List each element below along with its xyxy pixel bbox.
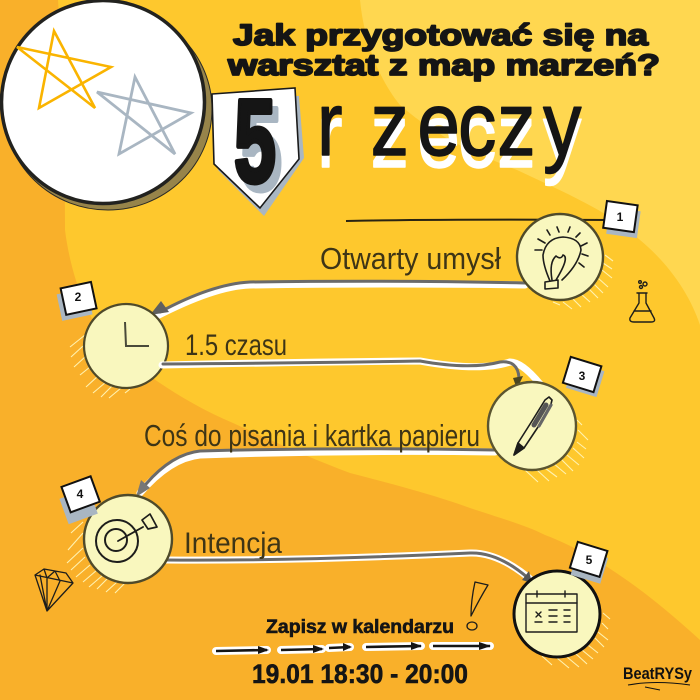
title — [227, 19, 660, 82]
step 1: Otwarty umysł — [150, 201, 641, 317]
heading: rzeczy: rzeczy — [317, 73, 582, 174]
hatch — [553, 255, 613, 309]
hatch — [70, 335, 130, 398]
badge: 5: 5 — [240, 84, 282, 216]
calendar note — [216, 617, 491, 689]
icon: grey star — [97, 77, 191, 154]
heading: rzeczy: rzeczy — [317, 85, 582, 186]
label: Coś do pisania i kartka papieru — [144, 418, 480, 453]
icon: pen — [514, 397, 552, 455]
number badge 1 — [603, 201, 641, 238]
title: Jak przygotować się na — [233, 19, 648, 52]
step 4: Intencja — [59, 476, 535, 593]
arrow 2 to 3 — [162, 361, 540, 389]
number badge 3 — [563, 357, 604, 397]
number badge 4 — [59, 476, 100, 524]
arrows — [216, 642, 491, 654]
icon: calendar — [526, 591, 577, 632]
logo: BeatRYSy — [623, 664, 692, 690]
icon: clock hands — [125, 322, 149, 346]
icon: light bulb — [535, 227, 588, 289]
heading: Zapisz w kalendarzu — [266, 617, 454, 638]
date and time: 19.01 18:30 - 20:00 — [252, 659, 468, 689]
number badge 1: 1 — [617, 210, 624, 224]
step 5: calendar — [514, 542, 610, 668]
circle with stars — [2, 0, 212, 210]
arrow 3 to 4 — [136, 449, 495, 497]
icon: exclamation mark — [467, 582, 488, 630]
badge: 5 — [212, 76, 304, 216]
top hand-drawn line — [346, 220, 610, 221]
label: Otwarty umysł — [320, 241, 501, 276]
number badge 2: 2 — [75, 290, 82, 304]
step 3: Coś do pisania i kartka papieru — [136, 357, 604, 497]
number badge 5: 5 — [586, 553, 593, 567]
icon: target with arrow — [96, 514, 157, 562]
icon: flask — [630, 281, 655, 322]
hatch — [542, 613, 610, 668]
label: Intencja — [184, 527, 282, 560]
icon: diamond — [35, 569, 73, 611]
number badge 4: 4 — [77, 487, 84, 501]
number badge 3: 3 — [579, 369, 586, 383]
label: 1.5 czasu — [185, 329, 287, 362]
hatch — [525, 420, 588, 482]
hatch — [67, 522, 125, 593]
arrow 4 to 5 — [166, 553, 535, 583]
icon: yellow star — [17, 31, 111, 108]
step 2: 1.5 czasu — [57, 282, 540, 398]
arrow 1 to 2 — [150, 281, 525, 317]
title: warsztat z map marzeń? — [227, 49, 660, 82]
badge: 5: 5 — [234, 76, 276, 208]
number badge 2 — [57, 282, 97, 321]
